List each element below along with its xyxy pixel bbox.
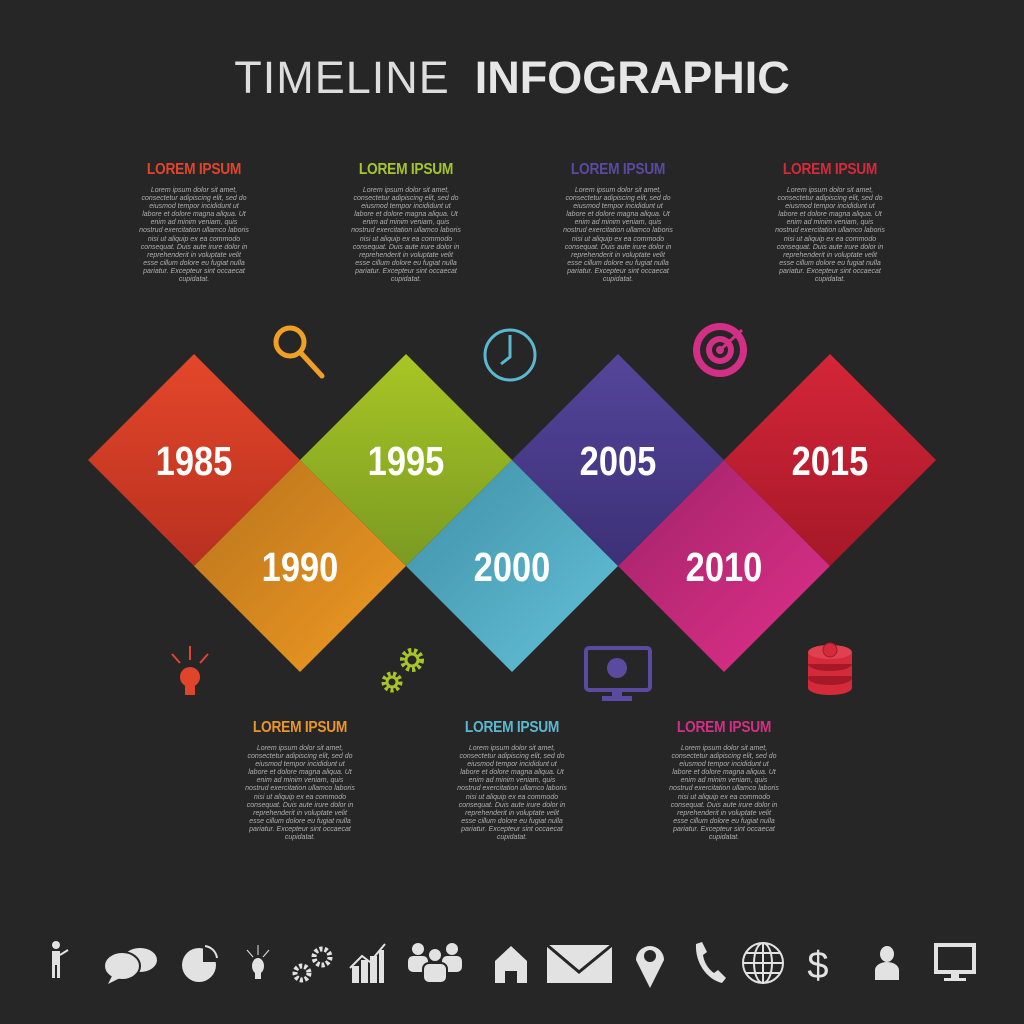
icon: magnifier xyxy=(276,328,322,376)
text block: 2000: LOREM IPSUM xyxy=(465,719,559,736)
icon: clock xyxy=(485,330,535,380)
text block: 1990: Lorem ipsum dolor sit amet, consectetur adipiscing elit, sed do eiusmod tempor incididunt ut labore et dolore magna aliqua. Ut enim ad minim veniam, quis nostrud exercitation ullamco laboris nisi ut aliquip ex ea commodo consequat. Duis aute irure dolor in reprehenderit in voluptate velit esse cillum dolore eu fugiat nulla pariatur. Excepteur sint occaecat cupidatat. xyxy=(245,745,355,841)
text block: 1985: Lorem ipsum dolor sit amet, consectetur adipiscing elit, sed do eiusmod tempor incididunt ut labore et dolore magna aliqua. Ut enim ad minim veniam, quis nostrud exercitation ullamco laboris nisi ut aliquip ex ea commodo consequat. Duis aute irure dolor in reprehenderit in voluptate velit esse cillum dolore eu fugiat nulla pariatur. Excepteur sint occaecat cupidatat. xyxy=(139,187,249,283)
diamond 2000: 2000 xyxy=(474,545,550,591)
diamond 1985: 1985 xyxy=(156,439,232,485)
text block: 2005: Lorem ipsum dolor sit amet, consectetur adipiscing elit, sed do eiusmod tempor incididunt ut labore et dolore magna aliqua. Ut enim ad minim veniam, quis nostrud exercitation ullamco laboris nisi ut aliquip ex ea commodo consequat. Duis aute irure dolor in reprehenderit in voluptate velit esse cillum dolore eu fugiat nulla pariatur. Excepteur sint occaecat cupidatat. xyxy=(563,187,673,283)
diamond 1990 xyxy=(194,460,406,672)
text block: 2000: Lorem ipsum dolor sit amet, consectetur adipiscing elit, sed do eiusmod tempor incididunt ut labore et dolore magna aliqua. Ut enim ad minim veniam, quis nostrud exercitation ullamco laboris nisi ut aliquip ex ea commodo consequat. Duis aute irure dolor in reprehenderit in voluptate velit esse cillum dolore eu fugiat nulla pariatur. Excepteur sint occaecat cupidatat. xyxy=(457,745,567,841)
icon: user xyxy=(875,946,899,980)
icon: target xyxy=(693,323,747,377)
text block: 1985: LOREM IPSUM xyxy=(147,161,241,178)
text block: 2005: LOREM IPSUM xyxy=(571,161,665,178)
icon: gears xyxy=(384,651,421,690)
icon: dollar: $ xyxy=(807,945,829,987)
icon: home xyxy=(495,946,527,983)
diamond 2010 xyxy=(618,460,830,672)
icon: pie xyxy=(182,946,218,982)
icon: bar chart xyxy=(350,944,385,983)
icon: map pin xyxy=(636,946,664,988)
diamond 2000 xyxy=(406,460,618,672)
text block: 1995: Lorem ipsum dolor sit amet, consectetur adipiscing elit, sed do eiusmod tempor incididunt ut labore et dolore magna aliqua. Ut enim ad minim veniam, quis nostrud exercitation ullamco laboris nisi ut aliquip ex ea commodo consequat. Duis aute irure dolor in reprehenderit in voluptate velit esse cillum dolore eu fugiat nulla pariatur. Excepteur sint occaecat cupidatat. xyxy=(351,187,461,283)
icon: group xyxy=(408,943,462,983)
icon: person pointing xyxy=(52,941,68,978)
bottom icon row xyxy=(52,941,974,988)
icon: bulb small xyxy=(247,945,269,979)
diamond 2015 xyxy=(724,354,936,566)
icon: gears small xyxy=(295,949,330,980)
text block: 2015: LOREM IPSUM xyxy=(783,161,877,178)
icon: coins xyxy=(808,643,852,695)
diamond 1990: 1990 xyxy=(262,545,338,591)
diamond 2010: 2010 xyxy=(686,545,762,591)
icon: monitor small xyxy=(936,945,974,981)
text block: 1990: LOREM IPSUM xyxy=(253,719,347,736)
icon: globe xyxy=(743,943,783,983)
icon: envelope xyxy=(547,945,612,983)
icon: bulb xyxy=(172,646,208,695)
text block: 2010: Lorem ipsum dolor sit amet, consectetur adipiscing elit, sed do eiusmod tempor incididunt ut labore et dolore magna aliqua. Ut enim ad minim veniam, quis nostrud exercitation ullamco laboris nisi ut aliquip ex ea commodo consequat. Duis aute irure dolor in reprehenderit in voluptate velit esse cillum dolore eu fugiat nulla pariatur. Excepteur sint occaecat cupidatat. xyxy=(669,745,779,841)
icon: monitor xyxy=(586,648,650,701)
diamond 2005 xyxy=(512,354,724,566)
icon: chat xyxy=(104,948,157,984)
text block: 1995: LOREM IPSUM xyxy=(359,161,453,178)
title: TIMELINE INFOGRAPHIC xyxy=(234,52,790,103)
icon: phone xyxy=(696,942,726,983)
diamond 1985 xyxy=(88,354,300,566)
diamond 2015: 2015 xyxy=(792,439,868,485)
diamond 1995: 1995 xyxy=(368,439,444,485)
diamond 2005: 2005 xyxy=(580,439,656,485)
diamond 1995 xyxy=(300,354,512,566)
text block: 2015: Lorem ipsum dolor sit amet, consectetur adipiscing elit, sed do eiusmod tempor incididunt ut labore et dolore magna aliqua. Ut enim ad minim veniam, quis nostrud exercitation ullamco laboris nisi ut aliquip ex ea commodo consequat. Duis aute irure dolor in reprehenderit in voluptate velit esse cillum dolore eu fugiat nulla pariatur. Excepteur sint occaecat cupidatat. xyxy=(775,187,885,283)
text block: 2010: LOREM IPSUM xyxy=(677,719,771,736)
